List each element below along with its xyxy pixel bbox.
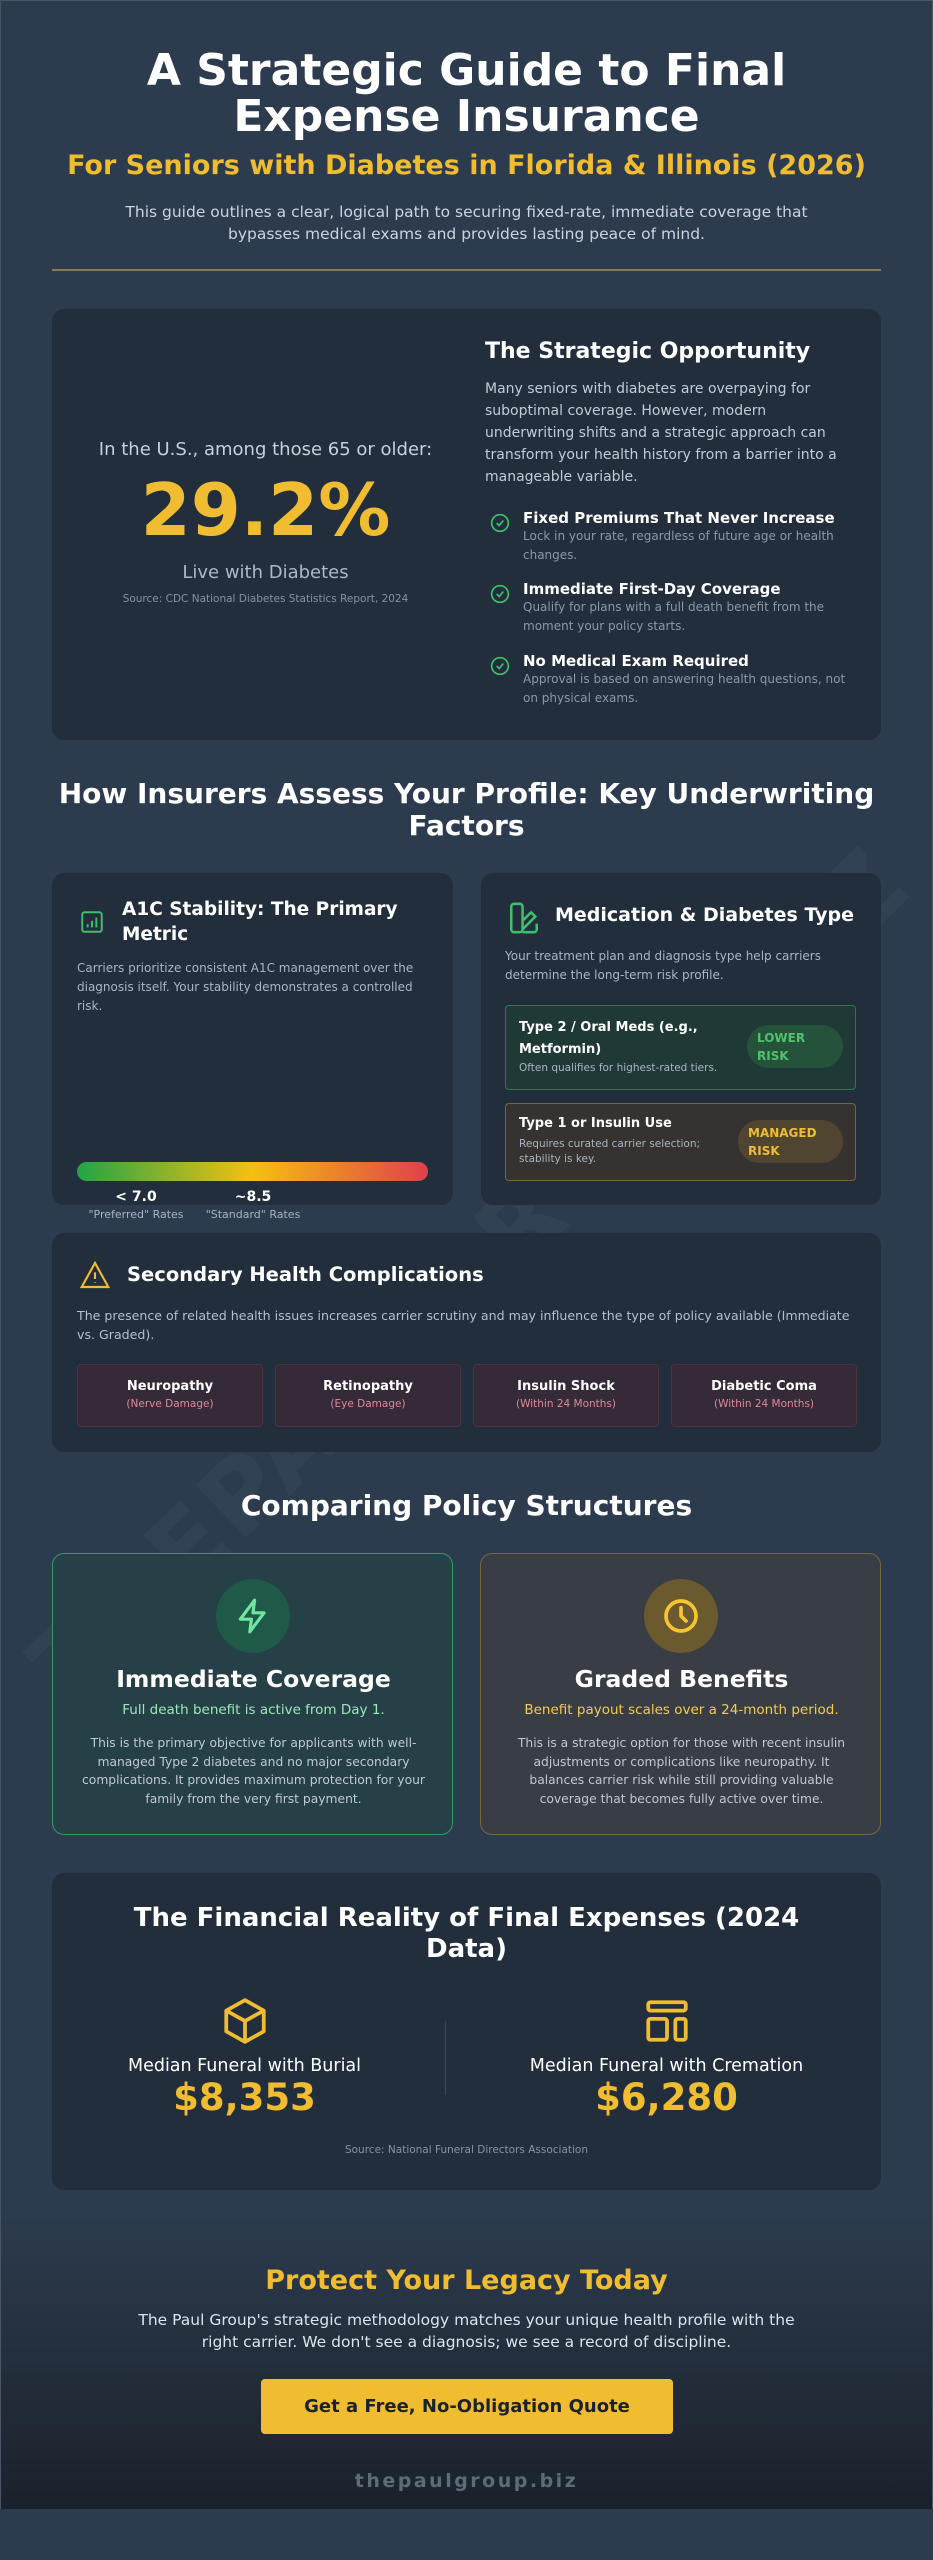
stat block [99,439,432,605]
title: Expense Insurance [233,91,700,142]
box: retinopathy: (Eye Damage) [330,1398,406,1410]
title: Immediate Coverage [116,1665,391,1693]
stat: burial: Median Funeral with Burial [128,2056,361,2076]
item: fixed premiums: Fixed Premiums That Never Increase [523,509,835,527]
box: type 1: Type 1 or Insulin Use [519,1116,672,1131]
icon: lightning [216,1579,290,1653]
box: retinopathy [275,1364,461,1427]
title [147,45,786,142]
bar labels: < 7.0 [115,1189,157,1205]
subtitle: For Seniors with Diabetes in Florida & Illinois (2026) [67,150,866,181]
badge: managed risk [738,1120,843,1163]
stat: cremation: $6,280 [595,2076,738,2119]
item: immediate coverage: Qualify for plans with a full death benefit from the moment your policy starts. [523,600,824,633]
item: immediate coverage [490,580,824,633]
bar labels: "Preferred" Rates [88,1208,184,1221]
CTA text: The Paul Group's strategic methodology matches your unique health profile with the right carrier. We don't see a diagnosis; we see a record of discipline. [138,2311,795,2351]
box: neuropathy [77,1364,263,1427]
opportunity text: Many seniors with diabetes are overpaying for suboptimal coverage. However, modern underwriting shifts and a strategic approach can transform your health history from a barrier into a manageable variable. [485,381,837,485]
complication boxes [77,1364,857,1427]
box: neuropathy: (Nerve Damage) [126,1398,214,1410]
item: no exam [490,652,845,705]
box: type 2: Often qualifies for highest-rated tiers. [519,1062,717,1074]
heading: The Financial Reality of Final Expenses (2024 Data) [134,1903,799,1964]
badge: lower risk: LOWER [757,1031,805,1045]
benefit list [490,509,845,705]
heading: comparing policies: Comparing Policy Structures [241,1489,692,1522]
text: "Standard" Rates [206,1208,300,1221]
panel: strategic opportunity [52,309,881,740]
item: no exam: Approval is based on answering health questions, not on physical exams. [523,672,845,705]
panel: medication type [481,873,881,1205]
badge: lower risk: RISK [757,1049,789,1063]
CTA section [1,2215,932,2509]
source: Source: National Funeral Directors Association [345,2144,588,2156]
text: Your treatment plan and diagnosis type help carriers determine the long-term risk profile. [505,949,821,982]
heading: Medication & Diabetes Type [555,904,854,926]
panel: financial reality [52,1873,881,2190]
box: retinopathy: Retinopathy [323,1379,413,1394]
text: vs. Graded). [77,1327,154,1342]
item: fixed premiums: Lock in your rate, regardless of future age or health changes. [523,529,834,562]
CTA heading: Protect Your Legacy Today [265,2265,668,2296]
opportunity text: The Strategic Opportunity [485,339,810,364]
box: type 1: Requires curated carrier selection; stability is key. [519,1138,700,1165]
heading: underwriting factors: How Insurers Assess Your Profile: Key Underwriting Factors [59,777,874,842]
heading: A1C Stability: The Primary Metric [122,899,398,945]
box: diabetic coma: (Within 24 Months) [714,1398,814,1410]
bar labels [88,1189,184,1221]
title: Graded Benefits [575,1665,788,1693]
item: no exam: No Medical Exam Required [523,652,749,670]
panel: graded benefits [480,1553,881,1835]
badge: lower risk [747,1025,843,1068]
heading: Secondary Health Complications [127,1263,484,1286]
subtitle: Full death benefit is active from Day 1. [122,1702,385,1718]
title: A Strategic Guide to Final [147,45,786,96]
badge: managed risk: RISK [748,1144,780,1158]
stat block: In the U.S., among those 65 or older: [99,439,432,460]
watermark: THEPAULGROUP.BIZ [8,824,932,1723]
stat: burial: $8,353 [173,2076,316,2119]
icon: layout [646,2000,688,2042]
icon: clock [644,1579,718,1653]
panel: A1C stability [52,873,453,1205]
gradient bar [77,1162,428,1181]
box: type 2: Type 2 / Oral Meds (e.g., Metformin) [519,1020,698,1057]
box: insulin shock: Insulin Shock [517,1379,615,1394]
box: type 1 [505,1103,856,1181]
box: diabetic coma: Diabetic Coma [711,1379,817,1394]
panel: immediate coverage [52,1553,453,1835]
text: The presence of related health issues increases carrier scrutiny and may influence the type of policy available (Immediate [77,1308,850,1323]
CTA button [261,2379,673,2434]
footer url: thepaulgroup.biz [355,2470,578,2492]
stat block: 29.2% [141,468,390,552]
item: fixed premiums [490,509,835,562]
box: insulin shock: (Within 24 Months) [516,1398,616,1410]
box: type 2 [505,1005,856,1090]
stat block: Live with Diabetes [182,562,349,583]
box: insulin shock [473,1364,659,1427]
icon: warning [80,1260,110,1288]
box: neuropathy: Neuropathy [127,1379,213,1394]
text [76,1308,850,1342]
icon: bar chart [81,911,103,933]
stat: cremation: Median Funeral with Cremation [530,2056,803,2076]
text: Carriers prioritize consistent A1C management over the diagnosis itself. Your stability demonstrates a controlled risk. [77,961,413,1013]
stat: burial [128,1998,361,2119]
body: This is a strategic option for those with recent insulin adjustments or complications like neuropathy. It balances carrier risk while still providing valuable coverage that becomes fully active over time. [518,1736,845,1806]
panel: secondary complications [52,1233,881,1452]
body: This is the primary objective for applicants with well-managed Type 2 diabetes and no major secondary complications. It provides maximum protection for your family from the very first payment. [82,1736,425,1806]
intro text: This guide outlines a clear, logical path to securing fixed-rate, immediate coverage that bypasses medical exams and provides lasting peace of mind. [125,203,808,243]
subtitle: Benefit payout scales over a 24-month period. [524,1702,839,1718]
item: immediate coverage: Immediate First-Day Coverage [523,580,780,598]
icon: medication [510,902,538,934]
stat block: Source: CDC National Diabetes Statistics Report, 2024 [123,593,408,605]
icon: box [224,1998,266,2044]
badge: managed risk: MANAGED [748,1126,817,1140]
stat: cremation [530,2000,803,2119]
panel: A1C stability: ~8.5 [235,1189,271,1205]
box: diabetic coma [671,1364,857,1427]
CTA button: Get a Free, No-Obligation Quote [304,2396,630,2417]
